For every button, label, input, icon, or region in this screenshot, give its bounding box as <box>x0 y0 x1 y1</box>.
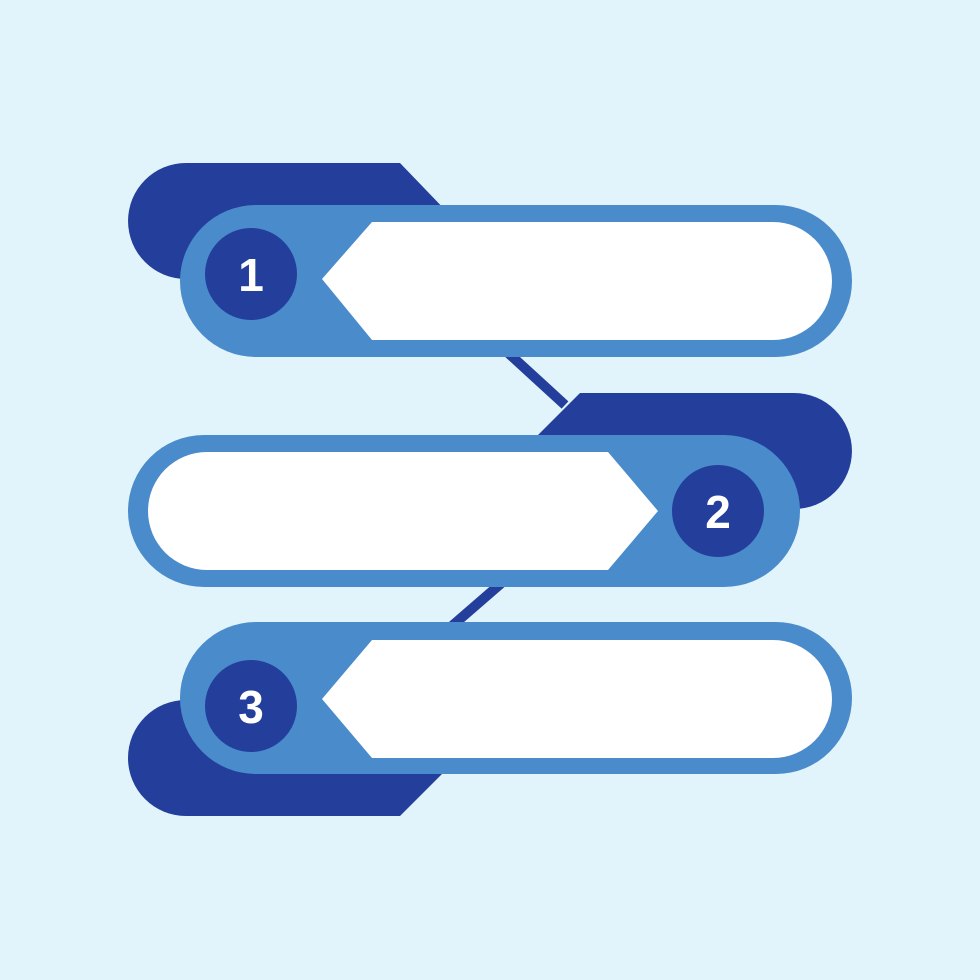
panel: step 2 <box>128 435 800 587</box>
connector: step 2 to 3 <box>445 580 505 632</box>
badge: 2 <box>672 465 764 557</box>
text box: step 2 <box>148 452 658 570</box>
badge: 3: 3 <box>238 681 264 733</box>
badge: 1: 1 <box>238 249 264 301</box>
badge: 1 <box>205 228 297 320</box>
text box: step 1 <box>322 222 832 340</box>
text box: step 3 <box>322 640 832 758</box>
badge: 3 <box>205 660 297 752</box>
panel: step 1 <box>180 205 852 357</box>
panel: step 3 <box>180 622 852 774</box>
badge: 2: 2 <box>705 486 731 538</box>
tab: step 3 dark <box>128 700 450 816</box>
connector: step 1 to 2 <box>505 350 565 405</box>
tab: step 2 dark <box>530 393 852 509</box>
tab: step 1 dark <box>128 163 450 279</box>
